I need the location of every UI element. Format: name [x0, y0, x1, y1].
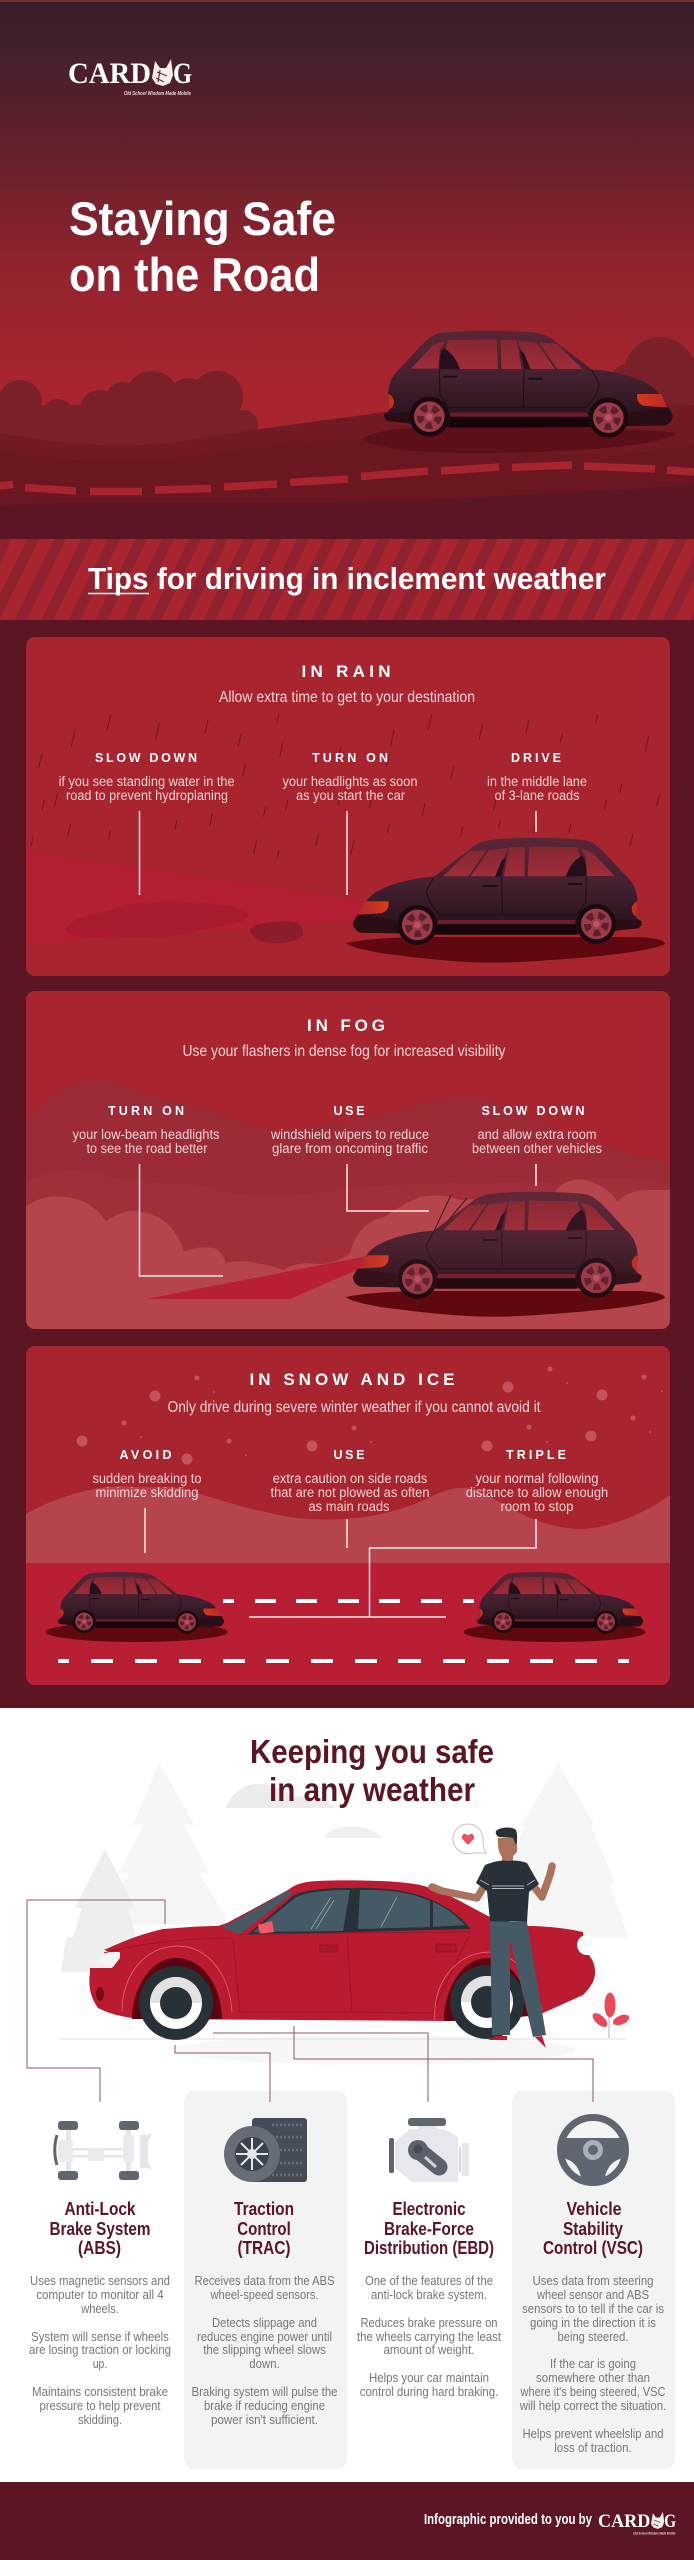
connector drops: [100, 2085, 593, 2102]
logo: CARD: [68, 57, 151, 90]
panel: in rain: [26, 637, 670, 976]
tip: slow down: road to prevent hydroplaning: [66, 788, 228, 803]
body text: wheels.: [80, 2301, 119, 2316]
hero top edge: [0, 0, 694, 2]
fog lamp: [96, 1987, 104, 2001]
scene backdrop: [60, 1763, 629, 2065]
front headlight: [97, 1952, 120, 1967]
heading: (TRAC): [238, 2238, 291, 2258]
lower lane dashes: [58, 1659, 629, 1663]
body text: If the car is going: [550, 2356, 636, 2371]
tip: use: USE: [334, 1448, 364, 1462]
back hill: [0, 405, 694, 539]
windshield: [222, 1891, 293, 1934]
handles: [320, 1944, 456, 1952]
subheading: Only drive during severe winter weather if you cannot avoid it: [168, 1399, 541, 1416]
body text: being steered.: [558, 2329, 628, 2344]
tip: slow down: between other vehicles: [472, 1141, 602, 1156]
bushes right: [610, 337, 694, 422]
tip: avoid: AVOID: [120, 1448, 172, 1462]
title: on the Road: [69, 248, 320, 301]
road surface: [0, 437, 694, 539]
tip: avoid: minimize skidding: [96, 1485, 198, 1500]
tip: triple: your normal following: [476, 1471, 598, 1486]
heading: Control (VSC): [543, 2238, 643, 2258]
logo: [68, 57, 192, 97]
wheel arches: [132, 1958, 530, 2021]
tip: use: extra caution on side roads: [273, 1471, 427, 1486]
body text: wheel sensor and ABS: [536, 2287, 649, 2302]
tip: drive: DRIVE: [511, 751, 561, 765]
tip: drive: [487, 751, 587, 832]
body text: [29, 2273, 171, 2427]
heading: Anti-Lock: [64, 2199, 136, 2219]
tree small left: [61, 1849, 146, 1972]
bushes left: [0, 371, 258, 455]
heading: (ABS): [78, 2238, 121, 2258]
tip: use: [270, 1104, 429, 1211]
body text: brake if reducing engine: [204, 2398, 325, 2413]
panel: in snow and ice: [26, 1346, 670, 1685]
shoes: [488, 2036, 546, 2048]
right car: [464, 1572, 646, 1642]
puddle large: [66, 902, 248, 938]
body text: Uses data from steering: [532, 2273, 654, 2288]
hero car: [384, 331, 673, 438]
car: [353, 838, 642, 945]
heading: [234, 2199, 294, 2258]
tip: turn on: [72, 1104, 223, 1276]
column: EBD: [357, 2199, 501, 2399]
tip: avoid: [92, 1448, 202, 1553]
icon: engine (EBD): [389, 2118, 469, 2182]
body text: sensors to to tell if the car is: [522, 2301, 664, 2316]
tip: turn on: TURN ON: [312, 751, 388, 765]
shirt: [476, 1861, 539, 1922]
tip: slow down: SLOW DOWN: [482, 1104, 584, 1118]
heart: [462, 1834, 474, 1845]
heading: Distribution (EBD): [364, 2238, 494, 2258]
fog layers: [26, 1080, 670, 1329]
trousers: [490, 1922, 546, 2037]
road dashes: [0, 465, 694, 492]
tip: slow down: and allow extra room: [478, 1127, 596, 1142]
ground line: [60, 2038, 626, 2040]
body text: computer to monitor all 4: [36, 2287, 164, 2302]
road base: [0, 485, 694, 539]
tree big left: [103, 1763, 226, 1925]
ground blob: [175, 2035, 575, 2065]
body text: One of the features of the: [365, 2273, 493, 2288]
body text: Helps your car maintain: [369, 2370, 489, 2385]
body text: anti-lock brake system.: [371, 2287, 487, 2302]
body text: Receives data from the ABS: [194, 2273, 335, 2288]
tip: triple: distance to allow enough: [466, 1485, 608, 1500]
road: [26, 1563, 670, 1685]
body text: where it's being steered, VSC: [520, 2384, 666, 2399]
door lines: [104, 1932, 470, 2013]
body text: the slipping wheel slows: [203, 2342, 326, 2357]
body text: Helps prevent wheelslip and: [522, 2426, 664, 2441]
section background: white: [0, 1708, 694, 2482]
window glare: [311, 1897, 397, 1929]
column: VSC: [519, 2199, 666, 2455]
panel: traction control background: [184, 2091, 347, 2469]
heading: Brake-Force: [384, 2219, 474, 2239]
heading: in snow and ice: IN SNOW AND ICE: [250, 1370, 454, 1389]
body text: will help correct the situation.: [519, 2398, 666, 2413]
column: TRAC: [192, 2199, 338, 2427]
tip: use: windshield wipers to reduce: [270, 1127, 429, 1142]
tip: drive: of 3-lane roads: [494, 788, 580, 803]
section background: maroon: [0, 0, 694, 1708]
body text: [357, 2273, 501, 2399]
heading: Brake System: [50, 2219, 150, 2239]
speech bubble: [453, 1824, 486, 1854]
body text: Braking system will pulse the: [192, 2384, 338, 2399]
heading: in fog: IN FOG: [307, 1016, 385, 1035]
hair: [496, 1827, 517, 1845]
body text: Detects slippage and: [212, 2315, 317, 2330]
body text: reduces engine power until: [197, 2329, 332, 2344]
shirt stripes: [480, 1880, 535, 1888]
subheading: Allow extra time to get to your destination: [219, 689, 475, 706]
tip: slow down: [59, 751, 235, 895]
tip: use: USE: [334, 1104, 364, 1118]
tip: turn on: TURN ON: [108, 1104, 184, 1118]
body text: the wheels carrying the least: [357, 2329, 501, 2344]
tail light: [577, 1935, 597, 1955]
window frame: [247, 1888, 470, 1935]
icon: dog head: [152, 59, 173, 86]
icon: steering wheel (VSC): [560, 2118, 626, 2182]
heading: [364, 2199, 494, 2258]
tip: triple: [249, 1448, 608, 1617]
tip: turn on: your headlights as soon: [282, 774, 418, 789]
snow hill: [26, 1487, 670, 1563]
red car: [89, 1880, 597, 2040]
headlight beam: [26, 852, 368, 945]
heading: in rain: IN RAIN: [302, 662, 390, 681]
body text: up.: [93, 2356, 107, 2371]
tip: use: as main roads: [308, 1499, 390, 1514]
footer: [0, 2482, 694, 2560]
heading: Stability: [563, 2219, 623, 2239]
body text: pressure to help prevent: [40, 2398, 161, 2413]
car shadow: [346, 1291, 665, 1317]
tip: slow down: if you see standing water in the: [59, 774, 235, 789]
heading: Control: [237, 2219, 291, 2239]
striped band heading: [0, 539, 694, 620]
body text: skidding.: [78, 2412, 122, 2427]
heading: keeping you safe: Keeping you safe: [250, 1733, 494, 1770]
arms: [432, 1866, 552, 1898]
front wheel: [139, 1966, 213, 2040]
heading: Electronic: [392, 2199, 466, 2219]
body text: amount of weight.: [384, 2342, 474, 2357]
heading: Vehicle: [566, 2199, 622, 2219]
tip: drive: in the middle lane: [487, 774, 587, 789]
body text: [519, 2273, 666, 2455]
car: [353, 1192, 642, 1299]
body text: System will sense if wheels: [31, 2329, 169, 2344]
body text: wheel-speed sensors.: [210, 2287, 318, 2302]
head: [498, 1838, 517, 1864]
body text: somewhere other than: [536, 2370, 650, 2385]
tip: turn on: as you start the car: [296, 788, 405, 803]
upper lane dashes: [223, 1599, 474, 1603]
body text: power isn't sufficient.: [211, 2412, 318, 2427]
hero car shadow: [363, 427, 677, 453]
footer logo: G: [664, 2511, 676, 2532]
footer text: Infographic provided to you by: [424, 2512, 592, 2528]
tip: turn on: your low-beam headlights: [72, 1127, 220, 1142]
body text: going in the direction it is: [530, 2315, 656, 2330]
wipers: [434, 1195, 467, 1231]
footer logo: [598, 2511, 676, 2536]
tip: turn on: to see the road better: [86, 1141, 208, 1156]
tip: use: [270, 1448, 430, 1548]
left car: [46, 1572, 228, 1642]
tip: use: that are not plowed as often: [270, 1485, 430, 1500]
heading: [543, 2199, 643, 2258]
heading: keeping you safe: in any weather: [269, 1771, 475, 1808]
heading: Traction: [234, 2199, 294, 2219]
column: ABS: [29, 2199, 171, 2427]
mirror: [258, 1921, 274, 1934]
heading: [50, 2199, 150, 2258]
body text: Reduces brake pressure on: [360, 2315, 498, 2330]
body text: Maintains consistent brake: [32, 2384, 168, 2399]
tip: avoid: sudden breaking to: [92, 1471, 202, 1486]
logo: Old School Wisdom Made Mobile: [124, 91, 191, 97]
plant: [590, 1992, 631, 2038]
footer logo: Old School Wisdom Made Mobile: [633, 2532, 676, 2536]
hero sky: [0, 0, 694, 539]
cloud small: [324, 1826, 383, 1838]
body text: [192, 2273, 338, 2427]
hero panel: [0, 0, 694, 539]
car shadow: [346, 937, 665, 963]
headlight beam: [146, 1257, 366, 1299]
body text: loss of traction.: [554, 2440, 632, 2455]
logo: G: [173, 57, 192, 90]
title: [69, 192, 336, 301]
panel: in fog: [26, 991, 670, 1329]
tip: triple: TRIPLE: [506, 1448, 566, 1462]
snowflakes: [76, 1366, 663, 1464]
icon: tires (TRAC): [224, 2118, 307, 2182]
cloud large: [226, 1784, 336, 1808]
heading: keeping you safe: [250, 1733, 494, 1808]
tree right: [487, 1763, 629, 1938]
body text: down.: [249, 2356, 280, 2371]
panel: vehicle stability control background: [512, 2091, 675, 2469]
body text: control during hard braking.: [360, 2384, 498, 2399]
puddle small: [250, 921, 303, 943]
title: Staying Safe: [69, 192, 336, 245]
tip: turn on: [282, 751, 418, 895]
tip: slow down: SLOW DOWN: [95, 751, 197, 765]
person: [432, 1824, 552, 2048]
striped band heading: Tips for driving in inclement weather: [88, 561, 606, 596]
tip: slow down: [472, 1104, 602, 1186]
tip: triple: room to stop: [500, 1499, 574, 1514]
rain streaks: [31, 713, 660, 860]
body text: are losing traction or locking: [29, 2342, 171, 2357]
body text: Uses magnetic sensors and: [30, 2273, 170, 2288]
footer logo: CARD: [598, 2511, 650, 2532]
connector lines behind car: [27, 1900, 593, 2102]
icon: chassis (ABS): [55, 2121, 151, 2180]
rear wheel: [450, 1965, 524, 2039]
subheading: Use your flashers in dense fog for increased visibility: [182, 1043, 506, 1060]
tip: use: glare from oncoming traffic: [272, 1141, 428, 1156]
highlight arcs: [122, 1946, 542, 2020]
windows: [253, 1890, 465, 1932]
